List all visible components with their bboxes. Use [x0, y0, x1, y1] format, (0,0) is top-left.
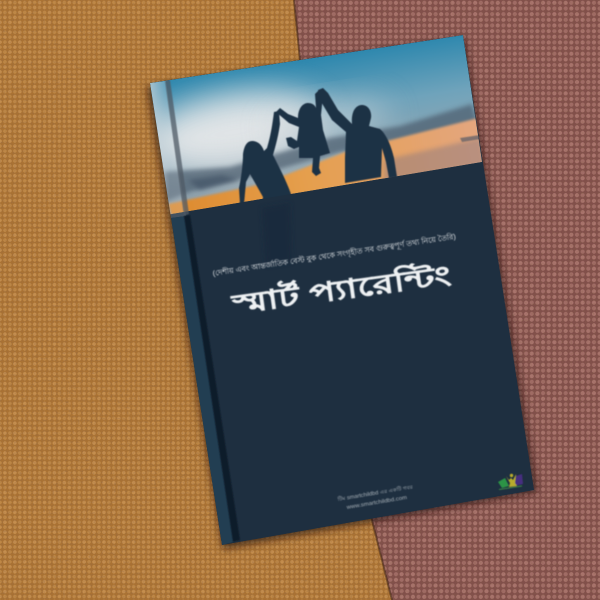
publisher line: টিম smartchildbd এর একটি গবর — [336, 484, 413, 503]
family silhouette — [239, 88, 397, 215]
child silhouette — [276, 90, 330, 176]
background: red fabric — [294, 0, 600, 600]
title: স্মার্ট প্যারেন্টিং — [229, 257, 453, 320]
subtitle: (দেশীয় এবং আন্তর্জাতিক বেস্ট বুক থেকে সংগৃহীত সব গুরুত্বপূর্ণ তথ্য নিয়ে তৈরি) — [212, 232, 456, 278]
book cover base — [150, 35, 534, 545]
book — [140, 35, 534, 545]
lower cover tint — [172, 162, 534, 545]
cover photo — [140, 35, 534, 545]
background: orange fabric — [0, 0, 392, 600]
spine — [150, 80, 240, 545]
website line: www.smartchildbd.com — [346, 495, 407, 511]
woman silhouette — [239, 111, 291, 215]
silhouette reflection — [262, 203, 292, 266]
icon: logo — [498, 474, 523, 490]
book drop shadow — [147, 38, 537, 549]
sky — [140, 35, 484, 218]
man silhouette — [318, 88, 397, 183]
